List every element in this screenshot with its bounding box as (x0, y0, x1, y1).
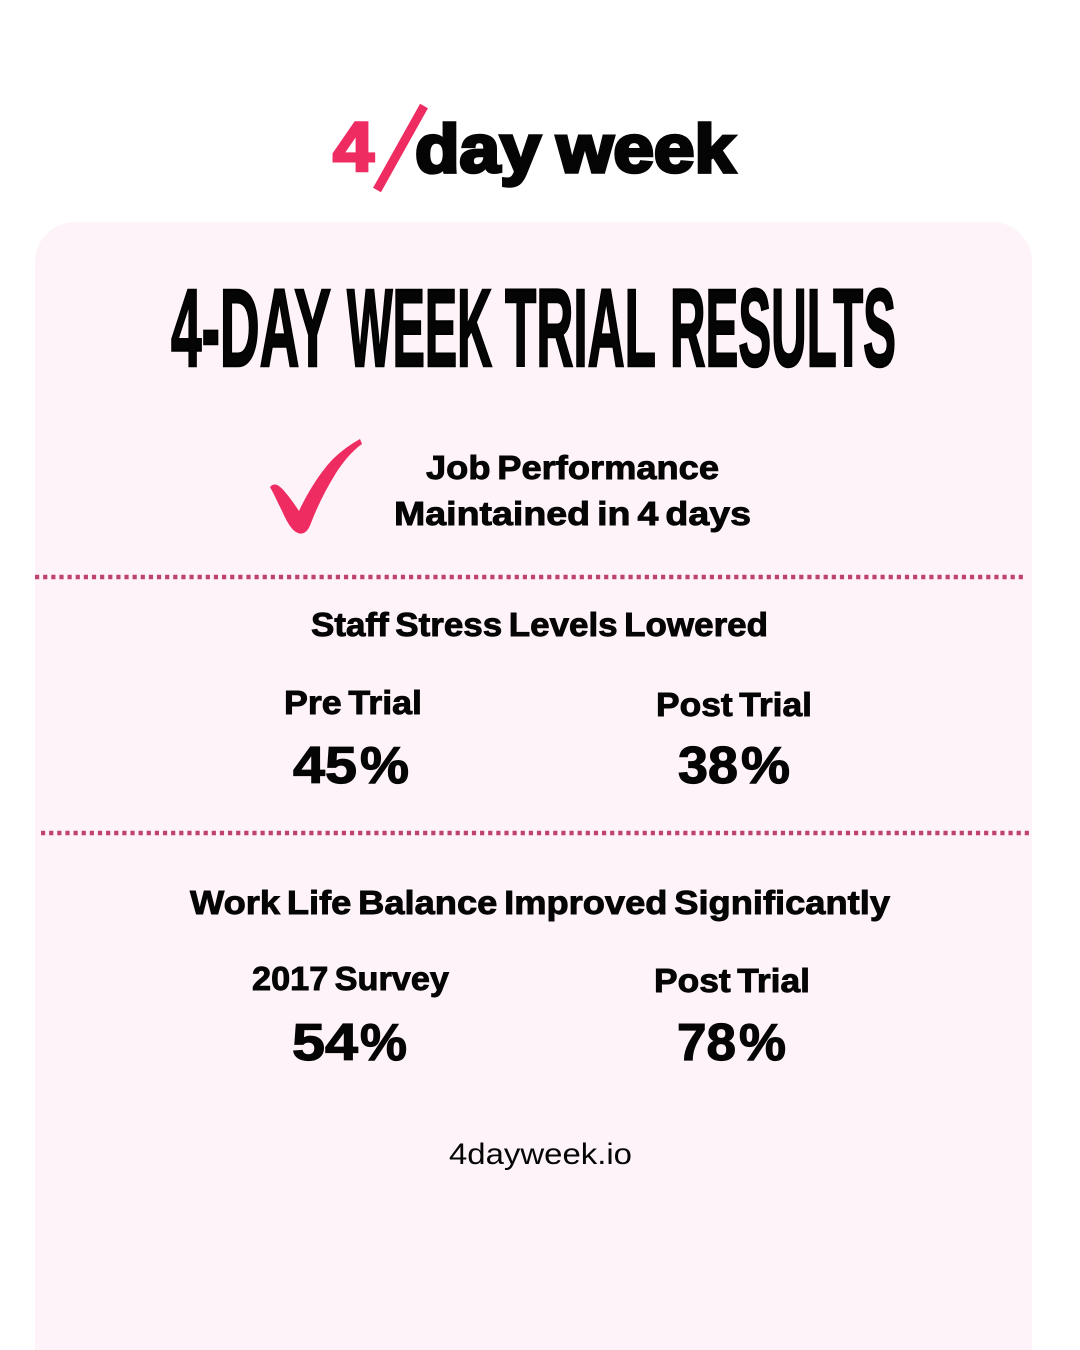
title: 4-DAY (171, 267, 331, 390)
stat: 2017 survey (252, 960, 450, 1072)
section: work life balance (190, 884, 891, 1072)
heading: work life balance: Work Life Balance Improved Significantly (190, 884, 891, 921)
section: staff stress levels (284, 606, 812, 795)
stat: post trial (656, 686, 812, 795)
heading: staff stress: Staff Stress Levels Lowered (311, 606, 768, 643)
title (171, 267, 896, 390)
stat: pre trial: Pre Trial (284, 684, 422, 721)
text: job performance: Maintained in 4 days (394, 495, 751, 532)
stat: pre trial (284, 684, 422, 795)
text: job performance: Job Performance (426, 449, 719, 486)
title: WEEK (347, 267, 492, 390)
icon: check mark (270, 439, 362, 534)
stat: 2017 survey: 54 (292, 1014, 358, 1072)
logo: 4/day week: 4 (333, 108, 374, 186)
stat: post trial: % (739, 1014, 786, 1072)
source link: 4dayweek.io (449, 1138, 632, 1171)
stat: post trial: % (741, 737, 790, 795)
text: job performance (394, 449, 751, 532)
stat: post trial: Post Trial (654, 962, 810, 999)
panel: results background (35, 222, 1032, 1350)
stat: 2017 survey: % (360, 1014, 407, 1072)
stat: post trial: 38 (678, 737, 738, 795)
stat: post trial (654, 962, 810, 1072)
logo: 4/day week: day week (415, 111, 735, 187)
stat: post trial: 78 (677, 1014, 736, 1072)
stat: pre trial: % (360, 737, 409, 795)
stat: post trial: Post Trial (656, 686, 812, 723)
stat: 2017 survey: 2017 Survey (252, 960, 450, 997)
title: TRIAL (505, 267, 656, 390)
logo: 4/day week (333, 106, 735, 190)
stat: pre trial: 45 (293, 737, 357, 795)
